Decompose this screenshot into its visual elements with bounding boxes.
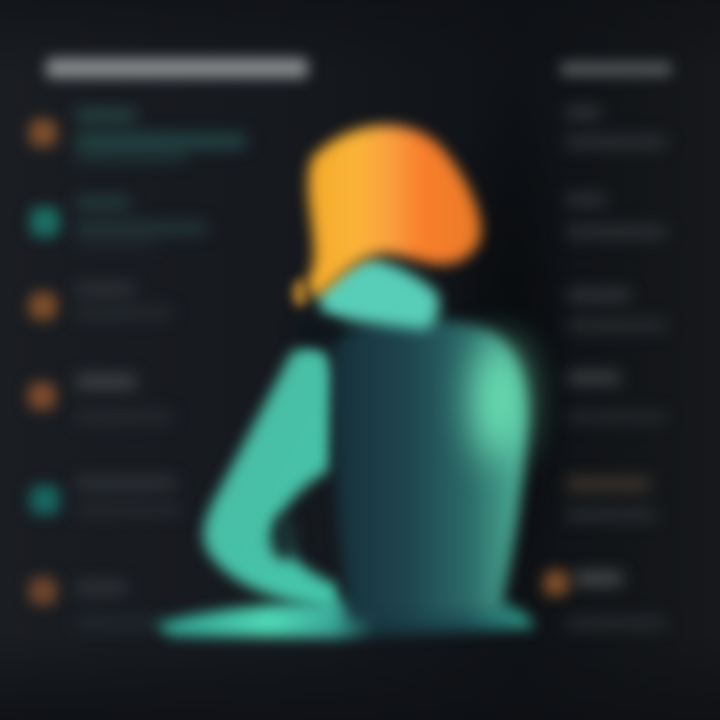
arm: left bent arm (203, 347, 338, 610)
icon: orange marker 4 (28, 382, 56, 410)
text: item 2 (76, 198, 206, 247)
highlight on shoulder (474, 340, 522, 460)
text: right item 6 (566, 572, 666, 628)
torso (333, 319, 527, 620)
text: item 1 (76, 110, 246, 161)
dark shoulder shadow (292, 321, 344, 343)
icon: orange marker 1 (29, 119, 57, 147)
text: right item 3 (566, 290, 666, 331)
gap between arm and body (270, 516, 298, 560)
text: right item 4 (566, 372, 666, 422)
right column list (566, 108, 666, 628)
text: right item 1 (566, 108, 666, 148)
hair (307, 125, 481, 296)
text: right item 5 (566, 478, 656, 520)
list item 4 (28, 375, 171, 422)
icon: teal marker 2 (30, 207, 60, 237)
list item 2 (30, 198, 206, 247)
heading: main title (46, 58, 308, 78)
text: item 4 (76, 375, 171, 422)
base: seated legs (155, 600, 534, 638)
text: right item 2 (566, 195, 666, 238)
figure shadow (440, 70, 580, 630)
list item 1 (29, 110, 246, 161)
collar / neck (318, 258, 439, 330)
icon: right orange marker (543, 570, 569, 596)
left column list (28, 110, 246, 627)
icon: orange marker 6 (29, 577, 57, 605)
list item 5 (30, 478, 181, 515)
icon: teal marker 5 (30, 485, 60, 515)
heading: right column title (560, 62, 672, 76)
hair lock (292, 279, 308, 307)
list item 6 (29, 577, 161, 627)
figure: person from behind (155, 70, 580, 638)
list item 3 (29, 284, 171, 320)
text: item 6 (76, 582, 161, 627)
text: item 5 (76, 478, 181, 515)
text: item 3 (76, 284, 171, 318)
icon: orange marker 3 (29, 292, 57, 320)
